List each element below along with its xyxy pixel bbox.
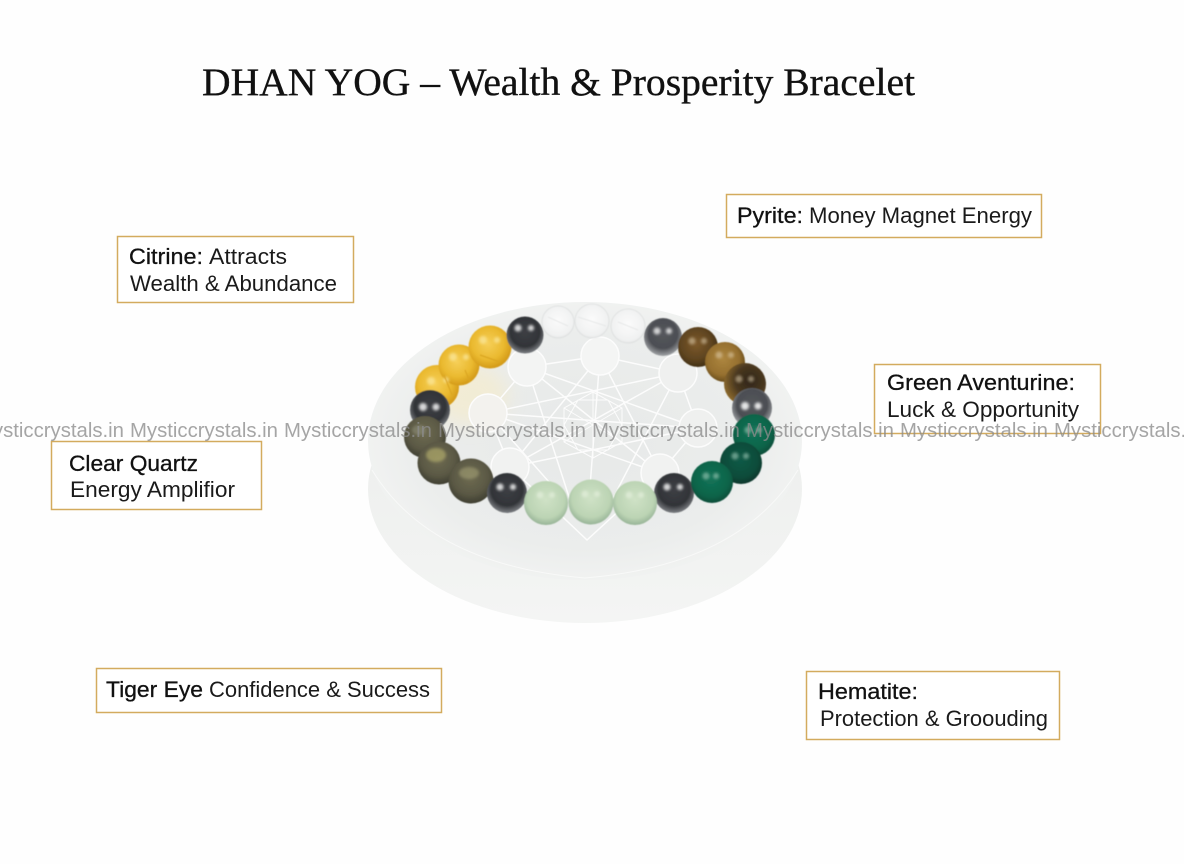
hematite spacer bead: bottom right [654, 473, 694, 513]
callout: hematite [806, 672, 1060, 740]
watermark: Mysticcrystals.in [900, 420, 1048, 442]
callout: clear quartz: Energy Amplifior [70, 477, 235, 502]
light aventurine beads [524, 480, 657, 525]
callout: clear quartz [52, 442, 262, 510]
callout: citrine [118, 236, 354, 302]
callout: hematite: Protection & Groouding [820, 706, 1048, 731]
green aventurine beads [691, 414, 775, 503]
bracelet [404, 304, 775, 525]
clear quartz beads [542, 304, 645, 343]
hematite spacer bead: top right [644, 318, 682, 356]
watermark: Mysticcrystals.in [438, 420, 586, 442]
sacred geometry engraving [469, 337, 717, 540]
watermark: Mysticcrystals.in [746, 420, 894, 442]
callout: tiger eye: Tiger Eye [106, 677, 203, 702]
callout: citrine: Wealth & Abundance [130, 271, 337, 296]
title: DHAN YOG – Wealth & Prosperity Bracelet [202, 61, 915, 104]
watermark: Mysticcrystals.in [130, 420, 278, 442]
watermark: Mysticcrystals.in [592, 420, 740, 442]
callout: clear quartz: Clear Quartz [69, 451, 198, 476]
watermark [0, 420, 1184, 442]
callout: tiger eye: Confidence & Success [209, 677, 430, 702]
callout: green aventurine: Green Aventurine: [887, 370, 1075, 395]
callout: pyrite [726, 194, 1042, 238]
selenite charging plate [368, 302, 802, 623]
pyrite beads [404, 416, 494, 504]
callout: citrine: Citrine: [129, 244, 203, 269]
callout: pyrite: Pyrite: [737, 203, 803, 228]
tiger eye beads [678, 327, 766, 405]
hematite spacer bead: bottom left [487, 473, 527, 513]
hematite spacer beads: top left and left [410, 316, 544, 430]
callout: citrine: Attracts [209, 244, 287, 269]
hematite spacer bead: right [732, 388, 772, 428]
watermark: Mysticcrystals.in [284, 420, 432, 442]
callout: pyrite: Money Magnet Energy [809, 203, 1032, 228]
callout: hematite: Hematite: [818, 679, 918, 704]
citrine beads [415, 326, 512, 409]
callout: green aventurine: Luck & Opportunity [887, 397, 1079, 422]
callout: green aventurine [874, 364, 1100, 434]
callout: tiger eye [96, 668, 442, 712]
